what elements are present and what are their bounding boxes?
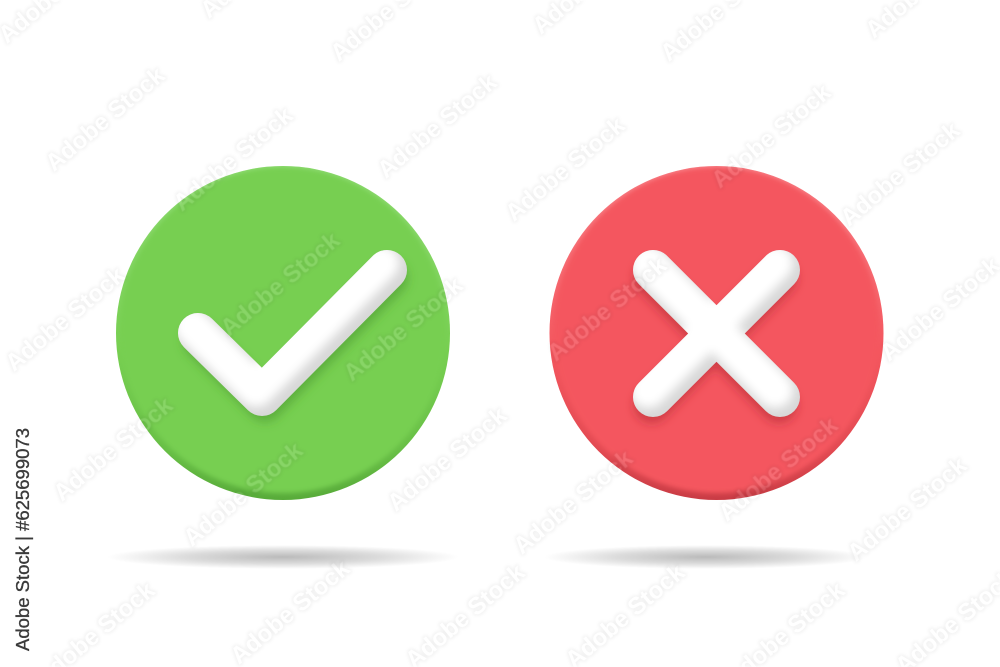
watermark pattern: Adobe Stock [842,451,973,567]
watermark pattern: Adobe Stock [40,61,171,177]
icon: green check badge [116,166,450,500]
shadow: under green badge [107,545,459,569]
watermark pattern: Adobe Stock [168,101,299,217]
icon: white check mark [192,263,387,396]
watermark pattern: Adobe Stock [382,401,513,517]
watermark pattern: Adobe Stock [706,78,837,194]
watermark pattern: Adobe Stock [48,391,179,507]
icon: white cross mark [648,263,780,397]
watermark pattern: Adobe Stock [508,444,639,560]
watermark pattern: Adobe Stock [215,226,346,342]
watermark pattern: Adobe Stock [178,436,309,552]
stock id caption: Adobe Stock | #625699073 [13,428,33,651]
watermark pattern: Adobe Stock [0,261,131,377]
shadow: under red badge [544,545,868,569]
watermark pattern: Adobe Stock [225,554,356,667]
watermark pattern: Adobe Stock [542,251,673,367]
watermark pattern: Adobe Stock [338,271,469,387]
watermark pattern: Adobe Stock [372,68,503,184]
watermark pattern: Adobe Stock [713,411,844,527]
icon: red cross badge [550,166,884,500]
watermark pattern: Adobe Stock [500,111,631,227]
watermark pattern: Adobe Stock [835,116,966,232]
